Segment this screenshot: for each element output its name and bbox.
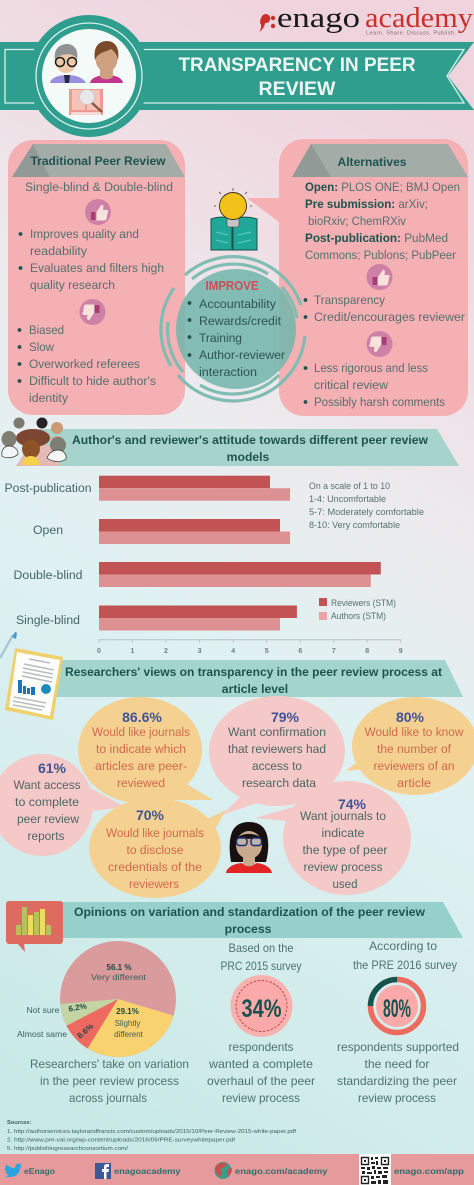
list: improvements: Rewards/credit: [199, 314, 282, 328]
axis: 2: [164, 648, 168, 655]
bubble: 79%: research data: [242, 776, 316, 790]
icon: bar chart speech box: [6, 901, 63, 952]
bubble: 74%: used: [332, 877, 358, 891]
pie labels: 6.2%: [68, 1002, 87, 1014]
scale note: On a scale of 1 to 10: [309, 481, 390, 491]
pie caption: Researchers' take on variation: [30, 1057, 189, 1071]
list: cons: critical review: [314, 378, 388, 392]
bubble: 70%: to disclose: [126, 843, 184, 857]
pie labels: 56.1 %: [107, 963, 131, 972]
examples text: Pre submission: arXiv;: [305, 197, 428, 211]
bubble: 79%: access to: [252, 759, 302, 773]
list: cons: Overworked referees: [29, 357, 140, 371]
bubble: 86.6%: reviewed: [117, 776, 165, 790]
bubble: 61%: Want access: [14, 778, 80, 792]
icon: globe: [214, 1162, 232, 1179]
list: improvements: interaction: [199, 365, 257, 379]
list: cons: Possibly harsh comments: [314, 395, 445, 409]
list: cons: [304, 361, 445, 409]
legend: Reviewers (STM): [331, 598, 396, 608]
description: the need for: [364, 1057, 430, 1071]
axis: [97, 640, 403, 655]
category labels: Double-blind: [14, 568, 83, 582]
category labels: [4, 481, 92, 627]
title: TRANSPARENCY IN PEER: [178, 54, 416, 76]
list: pros: [304, 293, 465, 324]
bubble: 79%: [209, 696, 345, 815]
pie caption: [30, 1057, 189, 1105]
section heading: attitudes: [16, 429, 459, 466]
stat: 80 percent: According to: [369, 939, 437, 953]
list: cons: Difficult to hide author's: [29, 374, 156, 388]
bubble: 74%: 74%: [338, 796, 367, 812]
bubble: 86.6%: to indicate which: [96, 742, 186, 756]
description: [207, 1040, 315, 1105]
description: overhaul of the peer: [207, 1074, 315, 1088]
sources: 2. http://www.pre-val.org/wp-content/uploads/2016/09/PRE-surveywhitepaper.pdf: [7, 1138, 235, 1144]
description: review process: [222, 1091, 300, 1105]
pie caption: across journals: [69, 1091, 147, 1105]
list: cons: identity: [29, 391, 69, 405]
icon: researcher woman with glasses: [226, 822, 272, 873]
axis: 8: [365, 648, 369, 655]
axis: 1: [131, 648, 135, 655]
legend: [319, 598, 396, 621]
logo: enago academy: academy: [365, 2, 474, 34]
axis: 6: [298, 648, 302, 655]
bar chart: attitudes to peer review models: [4, 476, 424, 655]
list: cons: Less rigorous and less: [314, 361, 428, 375]
section heading: attitudes: Author's and reviewer's attitude towards different peer review: [72, 433, 429, 447]
bubble: 80%: article: [397, 776, 431, 790]
pie labels: Slightly: [115, 1019, 140, 1028]
stat: 80 percent: [337, 939, 459, 1105]
examples text: [305, 180, 460, 262]
bubble: 80%: reviewers of an: [374, 759, 455, 773]
title banner: [0, 15, 474, 137]
bubble: 80%: 80%: [396, 709, 425, 725]
pie labels: [17, 963, 147, 1040]
list: cons: Slow: [29, 340, 54, 354]
sources: 1. http://authorservices.taylorandfrancis.com/custom/uploads/2015/10/Peer-Review-2015-white-paper.pdf: [7, 1129, 296, 1135]
bubble: 80%: [346, 697, 474, 795]
pie labels: Almost same: [17, 1030, 68, 1039]
description: respondents: [228, 1040, 294, 1054]
description: standardizing the peer: [337, 1074, 457, 1088]
bubble: 70%: reviewers: [129, 877, 179, 891]
category labels: Single-blind: [16, 613, 80, 627]
icon: thumbs down: [80, 299, 106, 325]
pie labels: Very different: [91, 973, 147, 982]
list: pros: Improves quality and: [30, 227, 139, 241]
bubble: 74%: review process: [304, 860, 382, 874]
description: wanted a complete: [208, 1057, 313, 1071]
stat: 80 percent: the PRE 2016 survey: [353, 958, 457, 972]
bubble: 86.6%: [78, 697, 213, 803]
bubble: 80%: the number of: [377, 742, 452, 756]
panel: alternatives: [247, 139, 468, 416]
section heading: attitudes: models: [227, 450, 270, 464]
list: pros: quality research: [30, 278, 115, 292]
list: pros: Evaluates and filters high: [30, 261, 164, 275]
section heading: researchers' views: Researchers' views on transparency in the peer review process at: [65, 665, 442, 679]
title second line: REVIEW: [259, 78, 336, 100]
value: 80%: 80%: [383, 995, 411, 1023]
bubble: 61%: peer review: [17, 812, 79, 826]
QR code: [359, 1154, 391, 1185]
icon: thumbs up: [366, 264, 392, 290]
list: pros: Transparency: [314, 293, 386, 307]
bubble: 61%: reports: [28, 829, 64, 843]
bubble: 61%: [0, 754, 125, 856]
pie labels: 8.6%: [76, 1022, 95, 1040]
examples text: Post-publication: PubMed: [305, 231, 448, 245]
pie labels: different: [114, 1030, 144, 1039]
bubble: 70%: 70%: [136, 807, 165, 823]
logo: enago academy: enago: [277, 2, 360, 34]
heading: alternatives: Alternatives: [338, 155, 407, 169]
icon: open book with magnifier: [69, 89, 103, 115]
list: pros: [19, 227, 164, 292]
panel: traditional peer review: [8, 140, 185, 415]
bubble: 61%: to complete: [15, 795, 79, 809]
section heading: opinions on variation: process: [225, 922, 272, 936]
heading: improve: IMPROVE: [206, 279, 258, 293]
axis: 5: [265, 648, 269, 655]
icon: thumbs up: [85, 199, 111, 225]
bubble: 70%: [89, 798, 226, 898]
examples text: Open: PLOS ONE; BMJ Open: [305, 180, 460, 194]
logo: enago academy: [260, 2, 474, 36]
bubble: 79%: that reviewers had: [228, 742, 326, 756]
description: [337, 1040, 459, 1105]
list: cons: Biased: [29, 323, 64, 337]
list: improvements: Training: [199, 331, 242, 345]
sources: 5. http://publishingresearchconsortium.com/: [7, 1146, 128, 1152]
axis: 4: [231, 648, 235, 655]
footer bar: [0, 1154, 474, 1185]
description: respondents supported: [337, 1040, 459, 1054]
bubble: 70%: credentials of the: [108, 860, 202, 874]
value: 34%: 34%: [242, 995, 282, 1023]
sources: [7, 1120, 296, 1152]
label: eEnago: eEnago: [24, 1166, 55, 1176]
subheading: Single-blind & Double-blind: [25, 180, 173, 194]
pie labels: 29.1%: [116, 1007, 139, 1016]
scale note: 5-7: Moderately comfortable: [309, 507, 424, 517]
list: improvements: Accountability: [199, 297, 277, 311]
icon: facebook: [95, 1163, 111, 1179]
bubble: 79%: Want confirmation: [228, 725, 326, 739]
icon: reviewer man and woman: [50, 41, 123, 83]
icon: twitter bird: [4, 1163, 22, 1177]
speech bubble group: researcher views: [0, 696, 474, 898]
bubble: 61%: 61%: [38, 760, 67, 776]
label: enago.com/app: enago.com/app: [394, 1166, 464, 1176]
bars: [99, 476, 381, 630]
legend: Authors (STM): [331, 611, 386, 621]
icon: thumbs down: [366, 331, 392, 357]
bubble: 74%: the type of peer: [302, 843, 388, 857]
heading: traditional peer review: Traditional Peer Review: [30, 154, 166, 168]
bubble: 86.6%: Would like journals: [92, 725, 190, 739]
label: enagoacademy: enagoacademy: [114, 1166, 181, 1176]
stat: 34 percent: [207, 941, 315, 1105]
section heading: researchers' views: article level: [222, 682, 288, 696]
description: review process: [358, 1091, 436, 1105]
axis: 9: [399, 648, 403, 655]
list: improvements: [188, 297, 285, 379]
bubble: 79%: 79%: [271, 709, 300, 725]
dashed circle: [230, 975, 292, 1037]
scale note: 1-4: Uncomfortable: [309, 494, 386, 504]
axis: 7: [332, 648, 336, 655]
examples text: bioRxiv; ChemRXiv: [308, 214, 407, 228]
bubble: 70%: Would like journals: [106, 826, 204, 840]
sources: Sources:: [7, 1120, 31, 1126]
bubble: 74%: [255, 781, 411, 895]
axis: 0: [97, 648, 101, 655]
axis: 3: [198, 648, 202, 655]
category labels: Post-publication: [4, 481, 92, 495]
bubble: 74%: indicate: [322, 826, 365, 840]
panel: improve circle: [161, 257, 305, 401]
icon: light bulb and book: [211, 188, 257, 250]
donut: [370, 980, 424, 1032]
logo: enago academy: Learn. Share. Discuss. Publish.: [366, 30, 456, 36]
stat: 34 percent: Based on the: [228, 941, 294, 955]
bubble: 74%: Want journals to: [300, 809, 386, 823]
bubble: 86.6%: 86.6%: [122, 709, 162, 725]
list: cons: [18, 323, 156, 405]
stat: 34 percent: PRC 2015 survey: [220, 959, 302, 973]
list: pros: Credit/encourages reviewer: [314, 310, 465, 324]
bubble: 86.6%: articles are peer-: [95, 759, 187, 773]
pie caption: in the peer review process: [40, 1074, 179, 1088]
section heading: researchers' views: [55, 660, 463, 697]
list: improvements: Author-reviewer: [199, 348, 285, 362]
icon: people around table: [2, 418, 66, 465]
pie labels: Not sure: [26, 1006, 60, 1015]
section heading: opinions on variation: Opinions on variation and standardization of the peer review: [74, 905, 426, 919]
icon: pen and document: [0, 632, 63, 720]
list: pros: readability: [30, 244, 88, 258]
category labels: Open: [33, 523, 63, 537]
scale note: 8-10: Very comfortable: [309, 520, 400, 530]
bubble: 80%: Would like to know: [364, 725, 464, 739]
section heading: opinions on variation: [60, 902, 463, 938]
label: enago.com/academy: enago.com/academy: [235, 1166, 328, 1176]
examples text: Commons; Publons; PubPeer: [305, 248, 456, 262]
pie chart: variation across journals: [17, 941, 176, 1057]
scale note: [309, 481, 424, 530]
